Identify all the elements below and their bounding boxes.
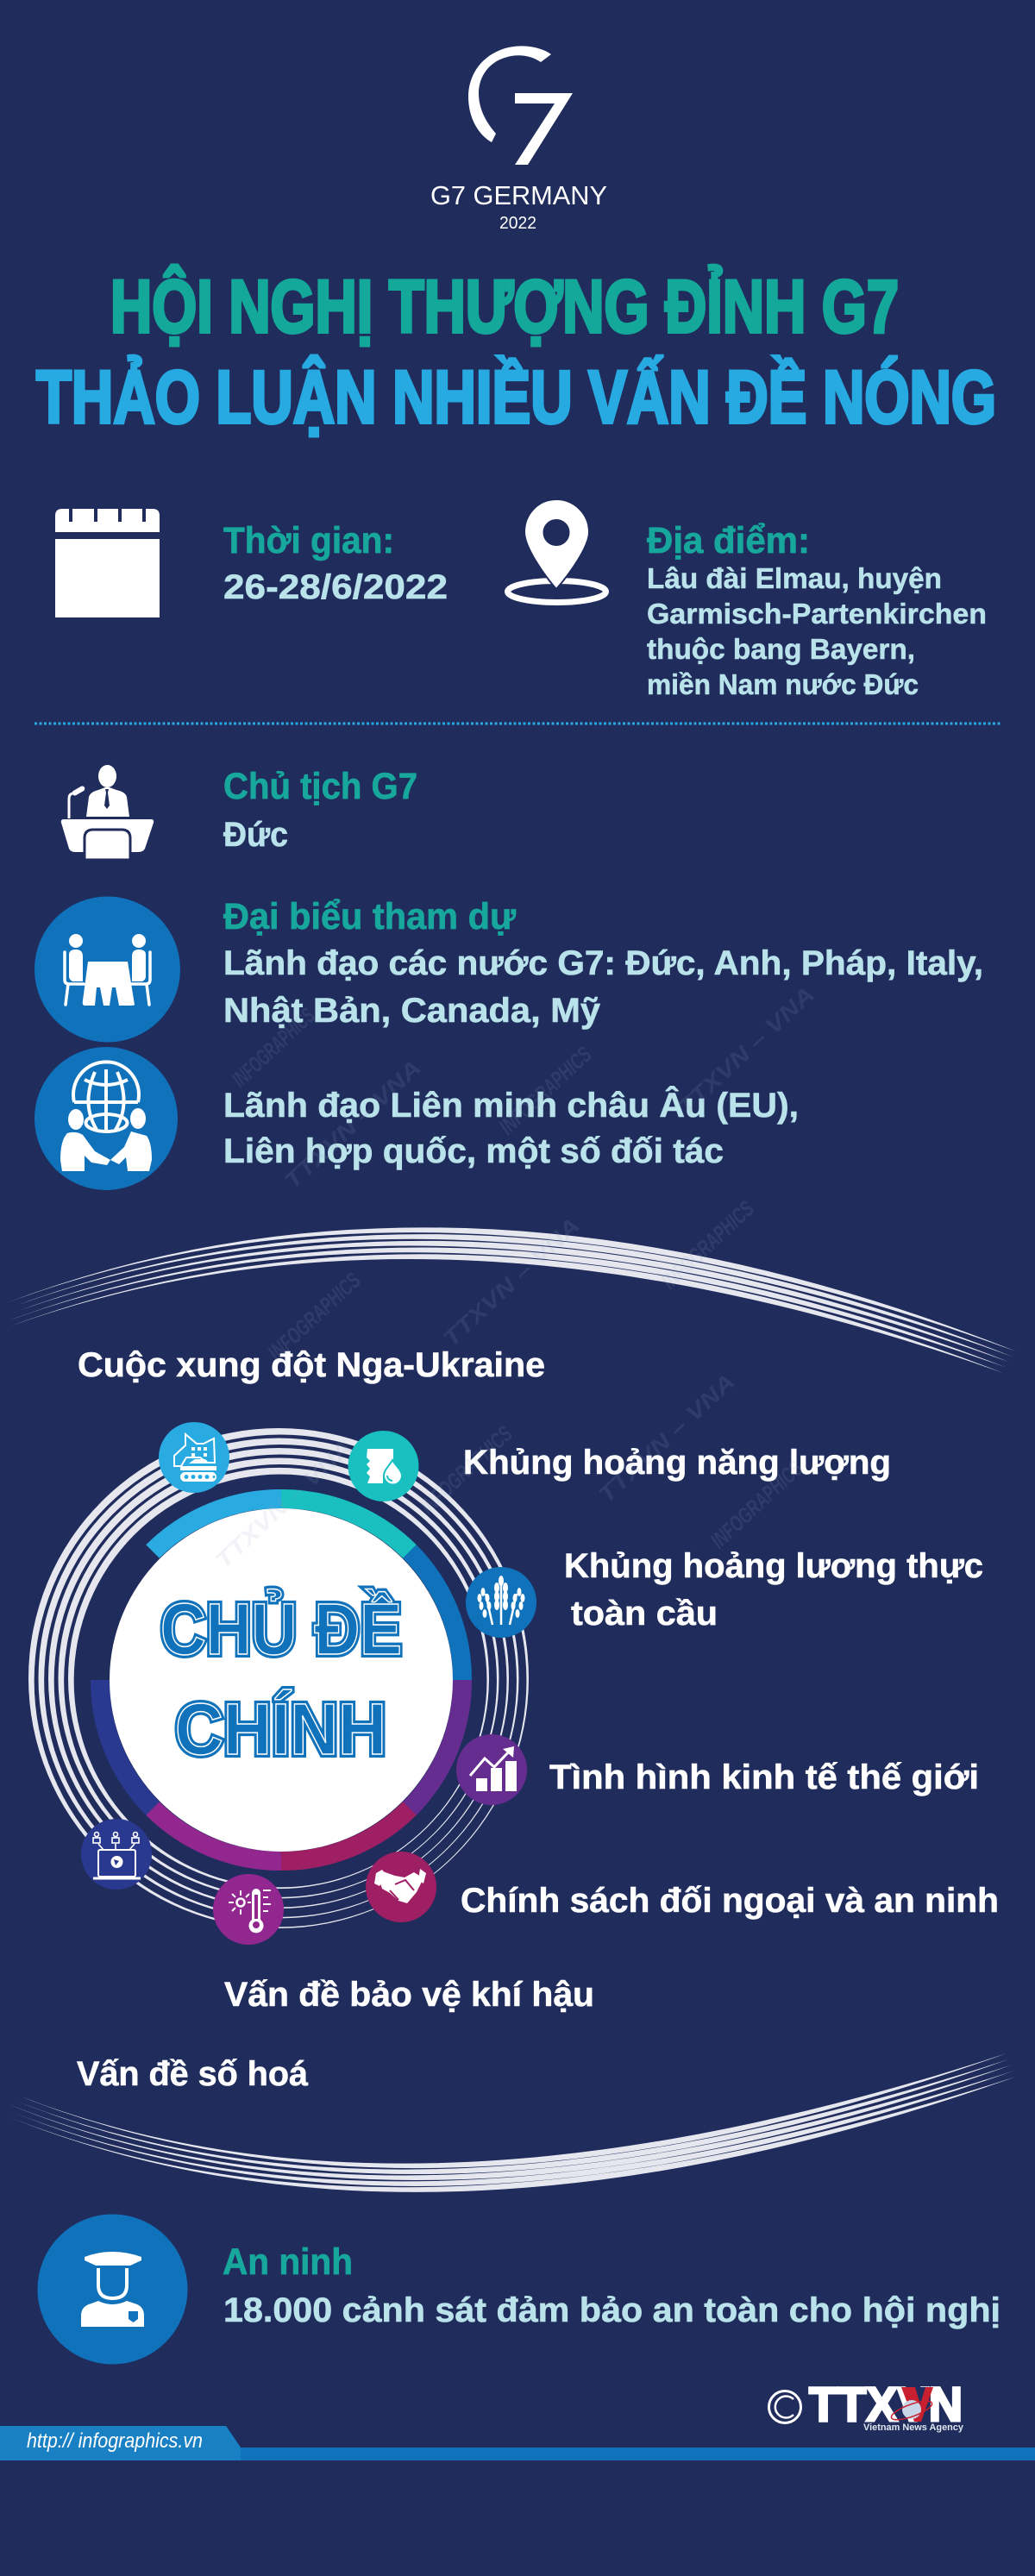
topic label: energy: Khủng hoảng năng lượng: [463, 1444, 891, 1482]
EU block: [223, 1085, 799, 1170]
EU block: Liên hợp quốc, một số đối tác: [223, 1132, 724, 1170]
security block: [223, 2241, 1000, 2329]
icon: handshake: [366, 1852, 436, 1922]
icon: thermometer: [213, 1874, 284, 1945]
icon: tank and ruined building: [159, 1422, 229, 1493]
watermarks: TTXVN – VNA: [210, 1434, 357, 1573]
location block: miền Nam nước Đức: [647, 668, 919, 700]
location block: Địa điểm:: [647, 520, 810, 561]
footer bar: http:// infographics.vn: [27, 2429, 203, 2453]
heading: main topics: CHÍNH: [175, 1689, 386, 1770]
topic label: economy: Tình hình kinh tế thế giới: [549, 1758, 979, 1796]
watermarks: INFOGRAPHICS: [263, 1267, 366, 1365]
location block: Lâu đài Elmau, huyện: [647, 562, 942, 594]
heading: main topics: CHỦ ĐỀ: [160, 1589, 402, 1670]
icon: globe and handshake: [34, 1047, 178, 1190]
icon: location pin: [507, 499, 605, 602]
topic label: food: toàn cầu: [571, 1595, 718, 1633]
heading: main topics: CHỦ ĐỀ: [160, 1589, 402, 1670]
heading: main topics: CHÍNH: [175, 1689, 386, 1770]
G7 Germany logo: 2022: [499, 214, 536, 233]
G7 Germany logo: [430, 46, 607, 233]
watermarks: INFOGRAPHICS: [415, 1420, 518, 1519]
decorative bottom arc: [5, 2053, 1016, 2192]
topic label: climate: Vấn đề bảo vệ khí hậu: [224, 1976, 594, 2014]
G7 Germany logo: G7 GERMANY: [430, 180, 607, 210]
EU block: Lãnh đạo Liên minh châu Âu (EU),: [223, 1085, 799, 1125]
icon: police officer: [38, 2215, 188, 2365]
icon: meeting table: [34, 897, 180, 1042]
icon: wheat: [466, 1567, 536, 1638]
security block: 18.000 cảnh sát đảm bảo an toàn cho hội nghị: [223, 2291, 1000, 2329]
heading: main topics: [160, 1589, 402, 1770]
delegates block: Nhật Bản, Canada, Mỹ: [223, 992, 601, 1030]
delegates block: Lãnh đạo các nước G7: Đức, Anh, Pháp, Italy,: [223, 944, 983, 982]
footer bar: [0, 2426, 1035, 2460]
title: [36, 266, 996, 439]
watermarks: TTXVN – VNA: [279, 1055, 426, 1194]
watermarks: [210, 981, 819, 1573]
time block: Thời gian:: [223, 520, 394, 561]
chair block: Chủ tịch G7: [223, 766, 417, 807]
topic label: food: [564, 1547, 983, 1633]
security block: An ninh: [223, 2241, 353, 2283]
icon: calendar: [55, 509, 160, 617]
time block: [223, 520, 448, 606]
topic label: foreign policy: Chính sách đối ngoại và an ninh: [461, 1882, 999, 1920]
watermarks: INFOGRAPHICS: [706, 1455, 808, 1553]
time block: 26-28/6/2022: [223, 568, 448, 606]
icon: podium speaker: [61, 765, 154, 860]
location block: [647, 520, 987, 700]
watermarks: TTXVN – VNA: [673, 981, 819, 1120]
watermarks: TTXVN – VNA: [593, 1369, 740, 1507]
logo: TTXVN: Vietnam News Agency: [863, 2422, 964, 2433]
chair block: [223, 766, 417, 854]
topic label: conflict: Cuộc xung đột Nga-Ukraine: [78, 1346, 545, 1384]
icon: oil barrel: [348, 1431, 419, 1501]
rings: [28, 1428, 529, 1928]
location block: Garmisch-Partenkirchen: [647, 598, 987, 630]
watermarks: INFOGRAPHICS: [227, 1002, 320, 1092]
delegates block: [223, 896, 983, 1030]
watermarks: TTXVN – VNA: [438, 1213, 585, 1351]
watermarks: INFOGRAPHICS: [494, 1041, 597, 1139]
logo: TTXVN: TTXVN: [809, 2377, 963, 2431]
icon: digital laptop: [81, 1819, 152, 1890]
central circle with coloured ring: [100, 1499, 462, 1861]
location block: thuộc bang Bayern,: [647, 633, 915, 665]
watermarks: INFOGRAPHICS: [656, 1195, 759, 1294]
decorative top arc: [3, 1227, 1016, 1373]
icon: economy chart: [456, 1734, 527, 1805]
chair block: Đức: [223, 816, 288, 854]
topic label: food: Khủng hoảng lương thực: [564, 1547, 983, 1585]
delegates block: Đại biểu tham dự: [223, 896, 517, 937]
topic label: digital: Vấn đề số hoá: [77, 2055, 309, 2093]
